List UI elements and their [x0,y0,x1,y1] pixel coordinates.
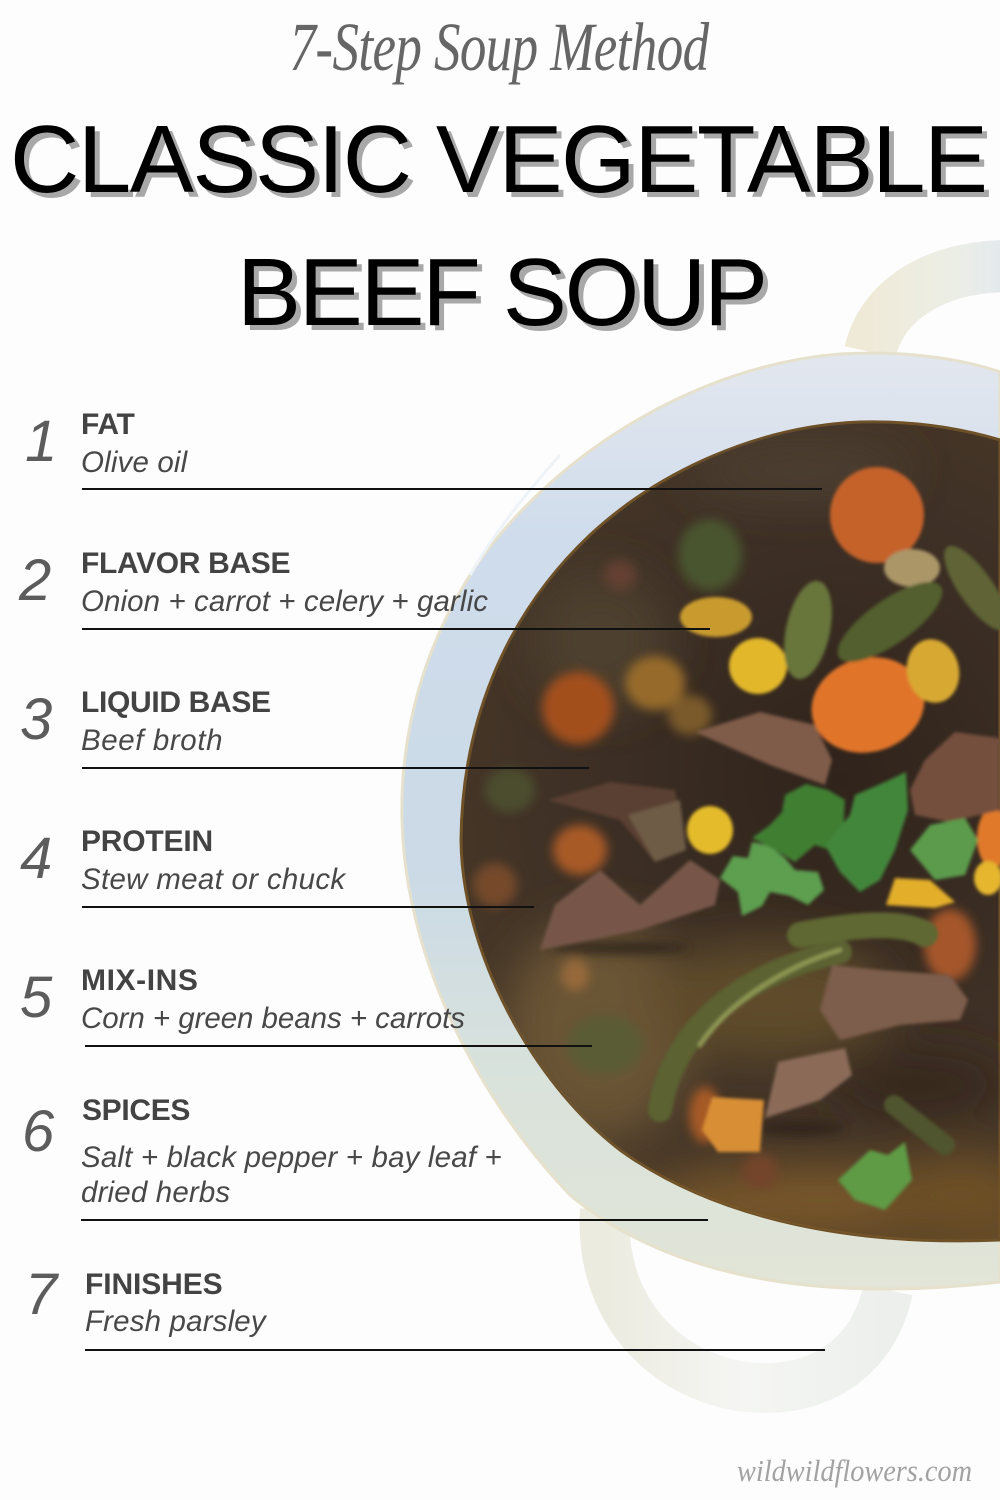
submerged vegetables [473,519,976,1190]
step 7: FINISHES [85,1268,223,1301]
step 3: Beef broth [81,724,223,756]
step 2: 2 [19,548,51,613]
step 1: 1 [25,409,57,474]
step 7: 7 [25,1262,57,1327]
step 4: PROTEIN [81,825,213,858]
step 5: 5 [20,965,52,1030]
bowl rim [402,353,1000,1289]
title line 2: BEEF SOUP [237,239,766,346]
step 7 [25,1262,825,1351]
website credit: wildwildflowers.com [737,1455,972,1489]
rim highlight [470,455,560,575]
vegetables and beef [540,467,1000,1210]
corn [729,638,787,694]
green beans [776,577,840,683]
step 2 [18,547,710,630]
step 6 [22,1094,708,1221]
parsley [720,842,824,916]
step 1: Olive oil [81,446,187,478]
step 6: dried herbs [81,1176,230,1208]
step 1: FAT [81,408,134,441]
step 6: 6 [22,1099,54,1164]
bowl handle: bottom [605,1210,888,1388]
step 3 [20,686,589,769]
step 6: Salt + black pepper + bay leaf + [81,1140,502,1174]
step 5 [20,964,592,1047]
soup bowl photo [400,240,1000,1413]
bowl handle: top [870,266,1000,352]
subtitle: 7-Step Soup Method [290,10,708,86]
step 1 [25,408,822,490]
title line 1: CLASSIC VEGETABLE [10,106,987,213]
beef chunks [695,712,832,785]
step 5: MIX-INS [81,964,199,997]
step 2: FLAVOR BASE [81,547,290,580]
carrots [830,467,924,563]
step 4: Stew meat or chuck [81,862,345,896]
broth colour variation [473,442,1000,1235]
step 3: LIQUID BASE [81,686,271,719]
step 5: Corn + green beans + carrots [81,1002,465,1034]
step 3: 3 [20,687,52,752]
soup broth [461,422,1000,1241]
step 6: SPICES [82,1094,190,1127]
step 4 [20,825,534,908]
step 4: 4 [20,826,52,891]
step 2: Onion + carrot + celery + garlic [81,584,488,618]
step 7: Fresh parsley [85,1304,266,1338]
